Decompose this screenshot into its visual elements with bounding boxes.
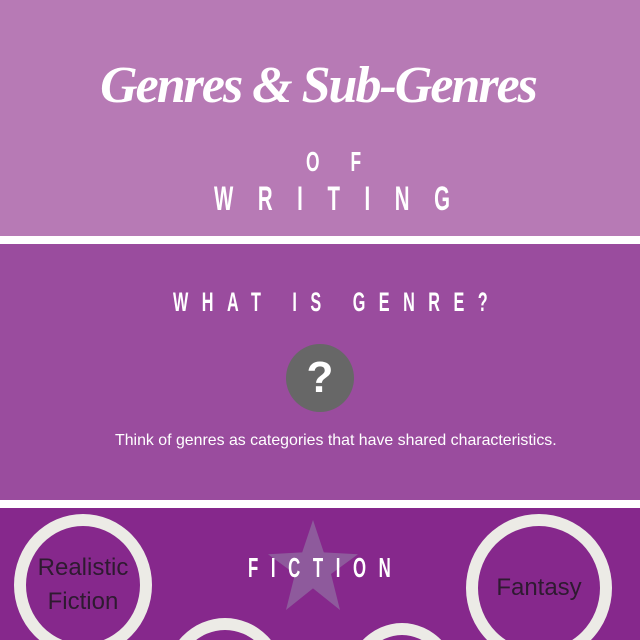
circle: fantasy: Fantasy (496, 574, 582, 601)
icon: question mark: ? (307, 353, 333, 402)
circle: realistic fiction: Fiction (48, 588, 118, 615)
heading: FICTION (248, 552, 403, 583)
panel: fiction (0, 508, 640, 640)
icon: star (268, 520, 358, 610)
icon: question mark (286, 344, 354, 412)
circle: bottom right (345, 623, 459, 640)
circle: realistic fiction (14, 514, 152, 640)
circle: realistic fiction: Realistic (38, 554, 128, 581)
panel: header (0, 0, 640, 236)
circle: bottom left (165, 618, 285, 640)
text block: Think of genres as categories that have shared characteristics. (115, 432, 557, 449)
subtitle: of: OF (306, 146, 392, 177)
panel: what is genre (0, 244, 640, 500)
subtitle: writing: WRITING (214, 180, 475, 218)
heading: WHAT IS GENRE? (173, 287, 501, 317)
circle: fantasy (466, 514, 612, 640)
title: Genres & Sub-Genres (100, 57, 536, 114)
